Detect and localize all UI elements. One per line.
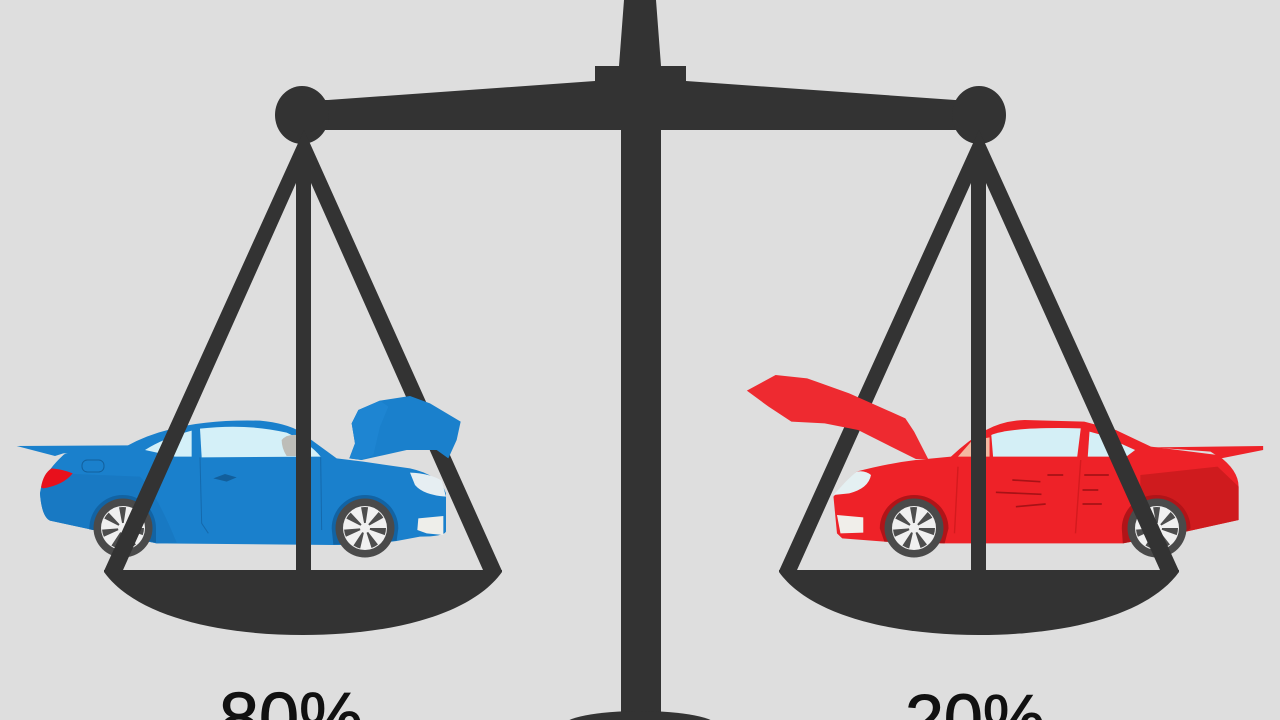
right pan hangers: [779, 130, 1179, 571]
right pivot: [952, 86, 1006, 144]
left pan hangers: [104, 130, 502, 571]
base of the stand: [563, 711, 717, 720]
right pan: [779, 570, 1179, 635]
blue car wheels: [94, 498, 394, 558]
left pivot: [275, 86, 329, 144]
central column: [310, 0, 975, 720]
blue car body: [17, 421, 446, 545]
red car body: [833, 420, 1263, 543]
blue car raised hood: [349, 396, 461, 460]
red car raised hood: [747, 375, 928, 459]
red car wheels: [884, 498, 1186, 558]
left pan: [104, 570, 502, 635]
